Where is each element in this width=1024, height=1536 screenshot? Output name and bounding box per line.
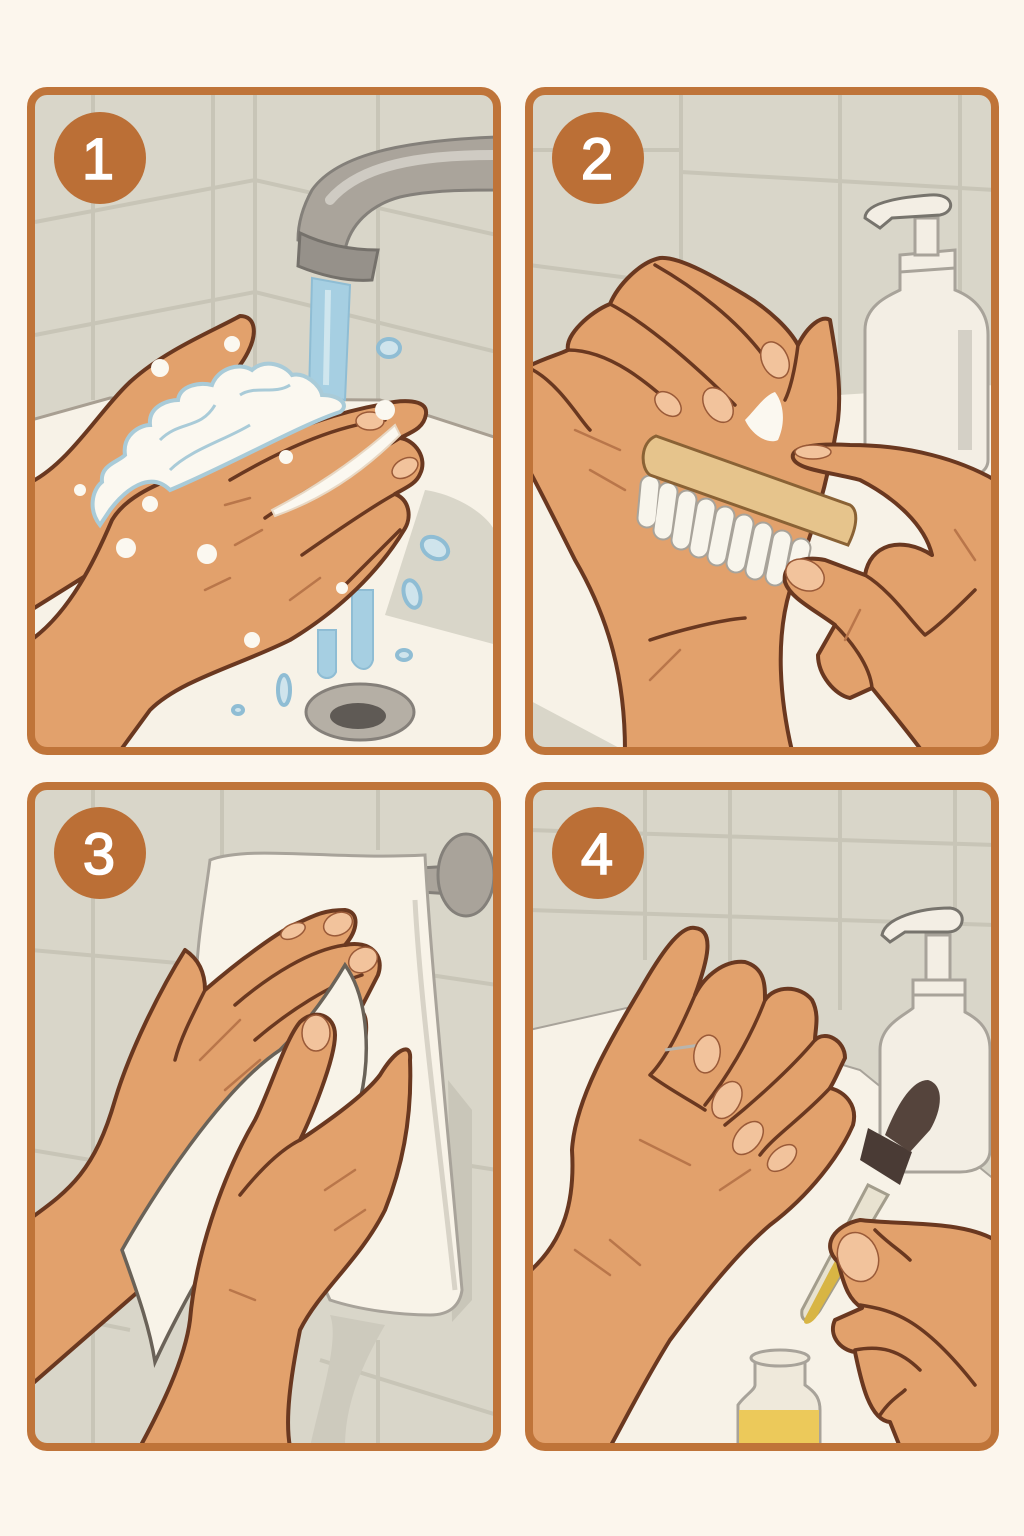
badge: step 3: 3 (83, 822, 115, 887)
panel 2: scrubbing nails with a brush (529, 91, 995, 751)
sink basin (31, 398, 497, 751)
dropper (802, 1080, 940, 1324)
badge: step 2: 2 (581, 127, 613, 192)
badge: step 2 (552, 112, 644, 204)
drain (306, 684, 414, 740)
panel 2 frame (529, 91, 995, 751)
towel shadow (310, 1315, 385, 1447)
faucet (298, 137, 497, 280)
hand holding dropper (830, 1220, 995, 1447)
badge: step 4: 4 (581, 822, 613, 887)
panel 4 frame (529, 786, 995, 1447)
badge: step 3 (54, 807, 146, 899)
back hand (31, 316, 254, 610)
left hand (529, 258, 839, 751)
oil bottle (738, 1350, 820, 1447)
open hand (529, 928, 854, 1447)
sink (529, 1005, 995, 1447)
panel 1: washing hands with soap under the tap (31, 91, 497, 751)
front hand (31, 401, 426, 751)
panel 3: drying hands with a towel (31, 786, 497, 1447)
right hand with thumb (785, 445, 995, 751)
badge: step 4 (552, 807, 644, 899)
towel rail (420, 834, 494, 916)
panel 3 frame (31, 786, 497, 1447)
nail brush (643, 436, 856, 576)
sink (529, 385, 995, 751)
hanging towel (196, 853, 462, 1315)
water droplets (233, 339, 452, 714)
badge: step 1 (54, 112, 146, 204)
soap pump bottle (880, 908, 990, 1172)
water stream (309, 278, 373, 678)
badge: step 1: 1 (82, 127, 114, 192)
soap foam (74, 336, 400, 648)
front hand (140, 1015, 410, 1447)
left arm and hand (31, 910, 380, 1385)
loose towel in hands (122, 965, 366, 1362)
soap pump bottle (865, 195, 988, 478)
panel 4: applying cuticle oil with a dropper (529, 786, 995, 1447)
panel 1 frame (31, 91, 497, 751)
